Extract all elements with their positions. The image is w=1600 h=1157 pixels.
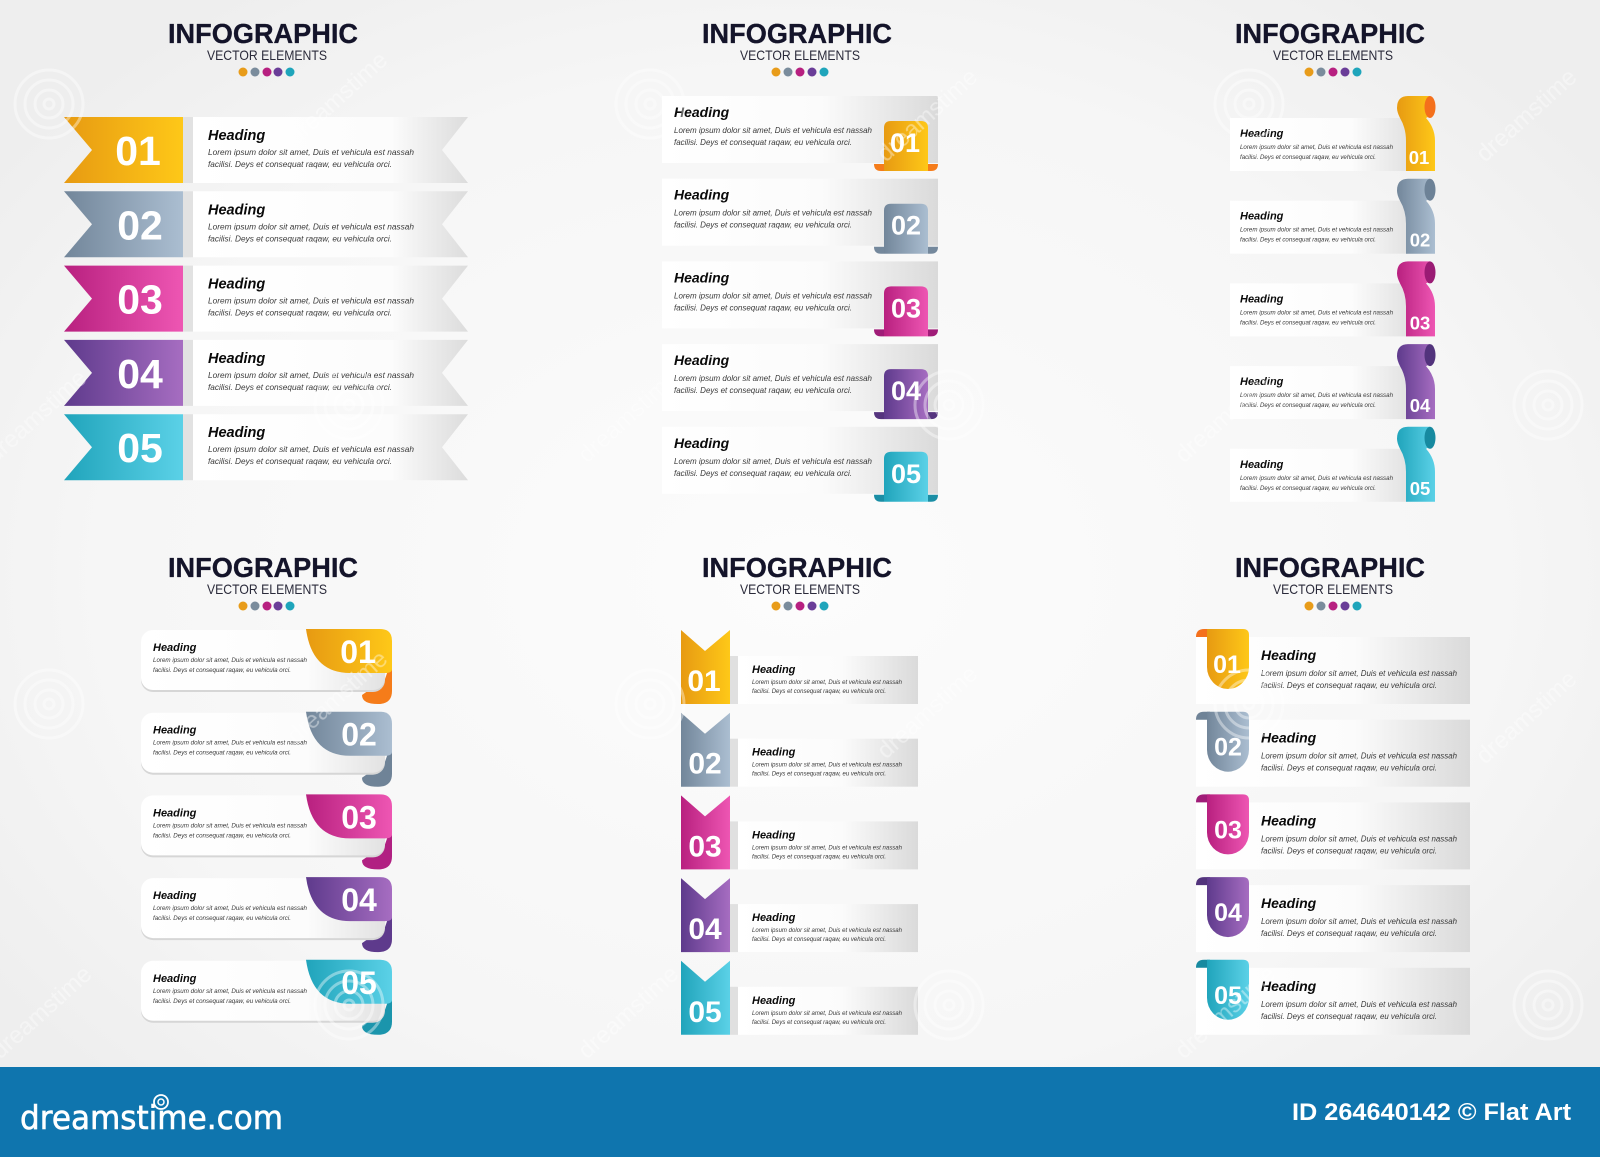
row 01: facilisi. Deys et consequat raqaw, eu vehicula orci. [208,159,392,169]
row 05: Heading [752,995,796,1007]
colour dots [772,68,828,76]
row 03: facilisi. Deys et consequat raqaw, eu vehicula orci. [208,308,392,318]
row 04: Heading [208,351,265,367]
row 01: Heading [674,104,730,120]
row 04: Lorem ipsum dolor sit amet, Duis et vehicula est nassah [1240,392,1393,399]
row 04: Heading [674,352,730,368]
row 02: facilisi. Deys et consequat raqaw, eu vehicula orci. [674,221,852,230]
row 04 [141,877,392,952]
row 01: 01 [687,665,721,698]
row 03: Lorem ipsum dolor sit amet, Duis et vehicula est nassah [752,844,902,851]
row 04: Lorem ipsum dolor sit amet, Duis et vehicula est nassah [752,927,902,934]
row 04: Heading [752,912,796,924]
row 05 [681,961,918,1035]
panel: ribbon list top left [64,18,468,480]
row 01 [662,96,938,171]
row 03: Heading [752,829,796,841]
row 02 [662,179,938,254]
row 03: Lorem ipsum dolor sit amet, Duis et vehicula est nassah [674,291,872,300]
watermark text: dreamstime [573,365,684,468]
row 04: Lorem ipsum dolor sit amet, Duis et vehicula est nassah [1261,917,1458,926]
row 01: facilisi. Deys et consequat raqaw, eu vehicula orci. [674,138,852,147]
row 05: Heading [674,435,730,451]
row 02 [681,713,918,787]
row 01: Heading [153,642,197,654]
row 02: facilisi. Deys et consequat raqaw, eu vehicula orci. [1240,237,1376,244]
title [168,18,358,63]
row 05 [662,427,938,502]
row 02: 02 [1214,734,1242,762]
panel: scroll list top right [1230,18,1436,502]
title: INFOGRAPHIC [1235,18,1425,49]
title: INFOGRAPHIC [702,552,892,583]
title: INFOGRAPHIC [168,18,358,49]
row 05: facilisi. Deys et consequat raqaw, eu vehicula orci. [752,1019,886,1026]
row 03: Heading [208,277,265,293]
row 05: facilisi. Deys et consequat raqaw, eu vehicula orci. [1240,485,1376,492]
row 05: Heading [1240,459,1284,471]
row 01 [1230,96,1436,171]
row 04: 04 [688,913,722,946]
row 03 [1230,261,1436,336]
watermark text: dreamstime [282,47,393,150]
row 05: 05 [1214,982,1242,1010]
row 04: 04 [1214,899,1242,927]
row 03: facilisi. Deys et consequat raqaw, eu vehicula orci. [153,832,291,839]
row 02 [1196,712,1470,787]
row 04: Heading [1261,895,1317,911]
row 03: facilisi. Deys et consequat raqaw, eu vehicula orci. [1261,846,1437,855]
footer bar [0,1067,1600,1157]
row 02: Heading [674,187,730,203]
row 05 [1230,427,1436,502]
row 04: 04 [117,351,163,397]
title: VECTOR ELEMENTS [740,581,860,597]
watermark text: dreamstime [1170,961,1281,1064]
row 02: Lorem ipsum dolor sit amet, Duis et vehicula est nassah [208,221,414,231]
row 02: facilisi. Deys et consequat raqaw, eu vehicula orci. [208,233,392,243]
watermark text: dreamstime [872,64,983,167]
row 05 [1196,960,1470,1035]
footer logo: dreamstime.com [20,1098,283,1137]
row 01: Lorem ipsum dolor sit amet, Duis et vehicula est nassah [1240,144,1393,151]
row 04: facilisi. Deys et consequat raqaw, eu vehicula orci. [1261,929,1437,938]
row 01: facilisi. Deys et consequat raqaw, eu vehicula orci. [1240,154,1376,161]
watermark text: dreamstime [1170,365,1281,468]
colour dots [238,68,294,76]
row 05: Lorem ipsum dolor sit amet, Duis et vehicula est nassah [208,444,414,454]
row 03: Heading [1261,812,1317,828]
row 03: Lorem ipsum dolor sit amet, Duis et vehicula est nassah [208,296,414,306]
title: VECTOR ELEMENTS [207,581,327,597]
row 03: facilisi. Deys et consequat raqaw, eu vehicula orci. [674,303,852,312]
panel: badge list top centre [662,18,938,502]
row 01: 01 [340,634,376,670]
colour dots [1304,602,1362,610]
row 02 [64,191,468,257]
title [702,552,892,597]
title [1235,552,1425,597]
row 05: Lorem ipsum dolor sit amet, Duis et vehicula est nassah [1240,475,1393,482]
row 04: Heading [1240,376,1284,388]
row 04: facilisi. Deys et consequat raqaw, eu vehicula orci. [1240,402,1376,409]
row 05: facilisi. Deys et consequat raqaw, eu vehicula orci. [1261,1012,1437,1021]
row 02: 02 [688,748,722,781]
row 05: Heading [208,425,265,441]
row 05 [64,414,468,480]
colour dots [1304,68,1362,76]
row 03: 03 [117,277,163,323]
row 03: Heading [153,807,197,819]
panel: rounded card list bottom left [141,552,392,1035]
row 02: facilisi. Deys et consequat raqaw, eu vehicula orci. [1261,764,1437,773]
row 02 [141,712,392,787]
row 02: Heading [208,202,265,218]
row 03 [64,266,468,332]
title: VECTOR ELEMENTS [207,47,327,63]
row 01: Heading [752,664,796,676]
title [1235,18,1425,63]
row 02 [1230,179,1436,254]
row 02: 02 [891,211,921,241]
row 05: Heading [153,973,197,985]
row 04 [681,878,918,952]
row 05: Lorem ipsum dolor sit amet, Duis et vehicula est nassah [752,1010,902,1017]
row 05: Lorem ipsum dolor sit amet, Duis et vehicula est nassah [153,988,307,995]
row 01: Heading [1240,128,1284,140]
row 02: Lorem ipsum dolor sit amet, Duis et vehicula est nassah [153,740,307,747]
title: INFOGRAPHIC [168,552,358,583]
watermark text: dreamstime [872,661,983,764]
row 02: Lorem ipsum dolor sit amet, Duis et vehicula est nassah [1240,227,1393,234]
row 03: Heading [674,269,730,285]
title [168,552,358,597]
row 03 [681,795,918,869]
row 04: 04 [891,376,921,406]
title [702,18,892,63]
row 05: Lorem ipsum dolor sit amet, Duis et vehicula est nassah [1261,1000,1458,1009]
row 02: Heading [153,725,197,737]
row 01 [141,629,392,704]
row 03: Lorem ipsum dolor sit amet, Duis et vehicula est nassah [1240,309,1393,316]
row 04: Lorem ipsum dolor sit amet, Duis et vehicula est nassah [674,374,872,383]
title: VECTOR ELEMENTS [1273,581,1393,597]
row 01: 01 [890,128,920,158]
row 03: 03 [1214,816,1242,844]
watermark text: dreamstime [282,646,393,749]
row 01: 01 [115,128,161,174]
colour dots [238,602,294,610]
title: INFOGRAPHIC [1235,552,1425,583]
watermark text: dreamstime [1471,666,1582,769]
row 02: Lorem ipsum dolor sit amet, Duis et vehicula est nassah [752,762,902,769]
row 03: facilisi. Deys et consequat raqaw, eu vehicula orci. [1240,319,1376,326]
row 02: 02 [1410,230,1430,251]
title: VECTOR ELEMENTS [1273,47,1393,63]
title: VECTOR ELEMENTS [740,47,860,63]
row 02: Lorem ipsum dolor sit amet, Duis et vehicula est nassah [1261,752,1458,761]
row 05: 05 [341,965,377,1001]
row 03: Heading [1240,293,1284,305]
row 04: facilisi. Deys et consequat raqaw, eu vehicula orci. [674,386,852,395]
row 05: facilisi. Deys et consequat raqaw, eu vehicula orci. [674,469,852,478]
row 03: Lorem ipsum dolor sit amet, Duis et vehicula est nassah [153,822,307,829]
row 01: Heading [208,128,265,144]
row 02: Heading [752,747,796,759]
row 04: facilisi. Deys et consequat raqaw, eu vehicula orci. [153,915,291,922]
row 01: Lorem ipsum dolor sit amet, Duis et vehicula est nassah [674,126,872,135]
row 01: Heading [1261,647,1317,663]
row 01 [1196,629,1470,704]
panel: bookmark list bottom centre [681,552,918,1035]
row 01: Lorem ipsum dolor sit amet, Duis et vehicula est nassah [1261,669,1458,678]
row 05: facilisi. Deys et consequat raqaw, eu vehicula orci. [208,456,392,466]
row 04 [1196,877,1470,952]
row 05 [141,960,392,1035]
watermark text: dreamstime [573,961,684,1064]
row 01: facilisi. Deys et consequat raqaw, eu vehicula orci. [752,688,886,695]
row 01: Lorem ipsum dolor sit amet, Duis et vehicula est nassah [752,679,902,686]
row 04 [662,344,938,419]
row 02: Heading [1261,730,1317,746]
watermark text: dreamstime [1471,64,1582,167]
row 05: facilisi. Deys et consequat raqaw, eu vehicula orci. [153,998,291,1005]
colour dots [772,602,828,610]
row 01: facilisi. Deys et consequat raqaw, eu vehicula orci. [153,667,291,674]
row 03: Lorem ipsum dolor sit amet, Duis et vehicula est nassah [1261,834,1458,843]
row 02: facilisi. Deys et consequat raqaw, eu vehicula orci. [752,771,886,778]
row 05: 05 [117,425,163,471]
row 01: facilisi. Deys et consequat raqaw, eu vehicula orci. [1261,681,1437,690]
row 02: 02 [117,202,163,248]
title: INFOGRAPHIC [702,18,892,49]
row 02: 02 [341,717,377,753]
row 04: Heading [153,890,197,902]
row 04: Lorem ipsum dolor sit amet, Duis et vehicula est nassah [153,905,307,912]
row 05: 05 [688,996,722,1029]
row 05: Heading [1261,978,1317,994]
panel: tab list bottom right [1196,552,1470,1035]
footer credit: ID 264640142 © Flat Art [1292,1099,1571,1126]
row 03: 03 [891,293,921,323]
row 03 [1196,794,1470,869]
row 05: 05 [891,459,921,489]
row 03 [141,794,392,869]
row 03: facilisi. Deys et consequat raqaw, eu vehicula orci. [752,853,886,860]
row 01 [681,630,918,704]
row 04 [1230,344,1436,419]
row 01: Lorem ipsum dolor sit amet, Duis et vehicula est nassah [208,147,414,157]
row 02: Lorem ipsum dolor sit amet, Duis et vehicula est nassah [674,209,872,218]
row 02: Heading [1240,211,1284,223]
row 04: 04 [341,882,377,918]
row 04: facilisi. Deys et consequat raqaw, eu vehicula orci. [208,382,392,392]
row 01: 01 [1213,651,1241,679]
row 01 [64,117,468,183]
row 04 [64,340,468,406]
row 03: 03 [688,830,722,863]
row 03: 03 [1410,312,1430,333]
row 03 [662,261,938,336]
row 02: facilisi. Deys et consequat raqaw, eu vehicula orci. [153,750,291,757]
row 05: Lorem ipsum dolor sit amet, Duis et vehicula est nassah [674,457,872,466]
row 01: 01 [1409,147,1429,168]
row 04: 04 [1410,395,1431,416]
row 03: 03 [341,799,377,835]
row 01: Lorem ipsum dolor sit amet, Duis et vehicula est nassah [153,657,307,664]
row 04: Lorem ipsum dolor sit amet, Duis et vehicula est nassah [208,370,414,380]
row 04: facilisi. Deys et consequat raqaw, eu vehicula orci. [752,936,886,943]
row 05: 05 [1410,478,1430,499]
